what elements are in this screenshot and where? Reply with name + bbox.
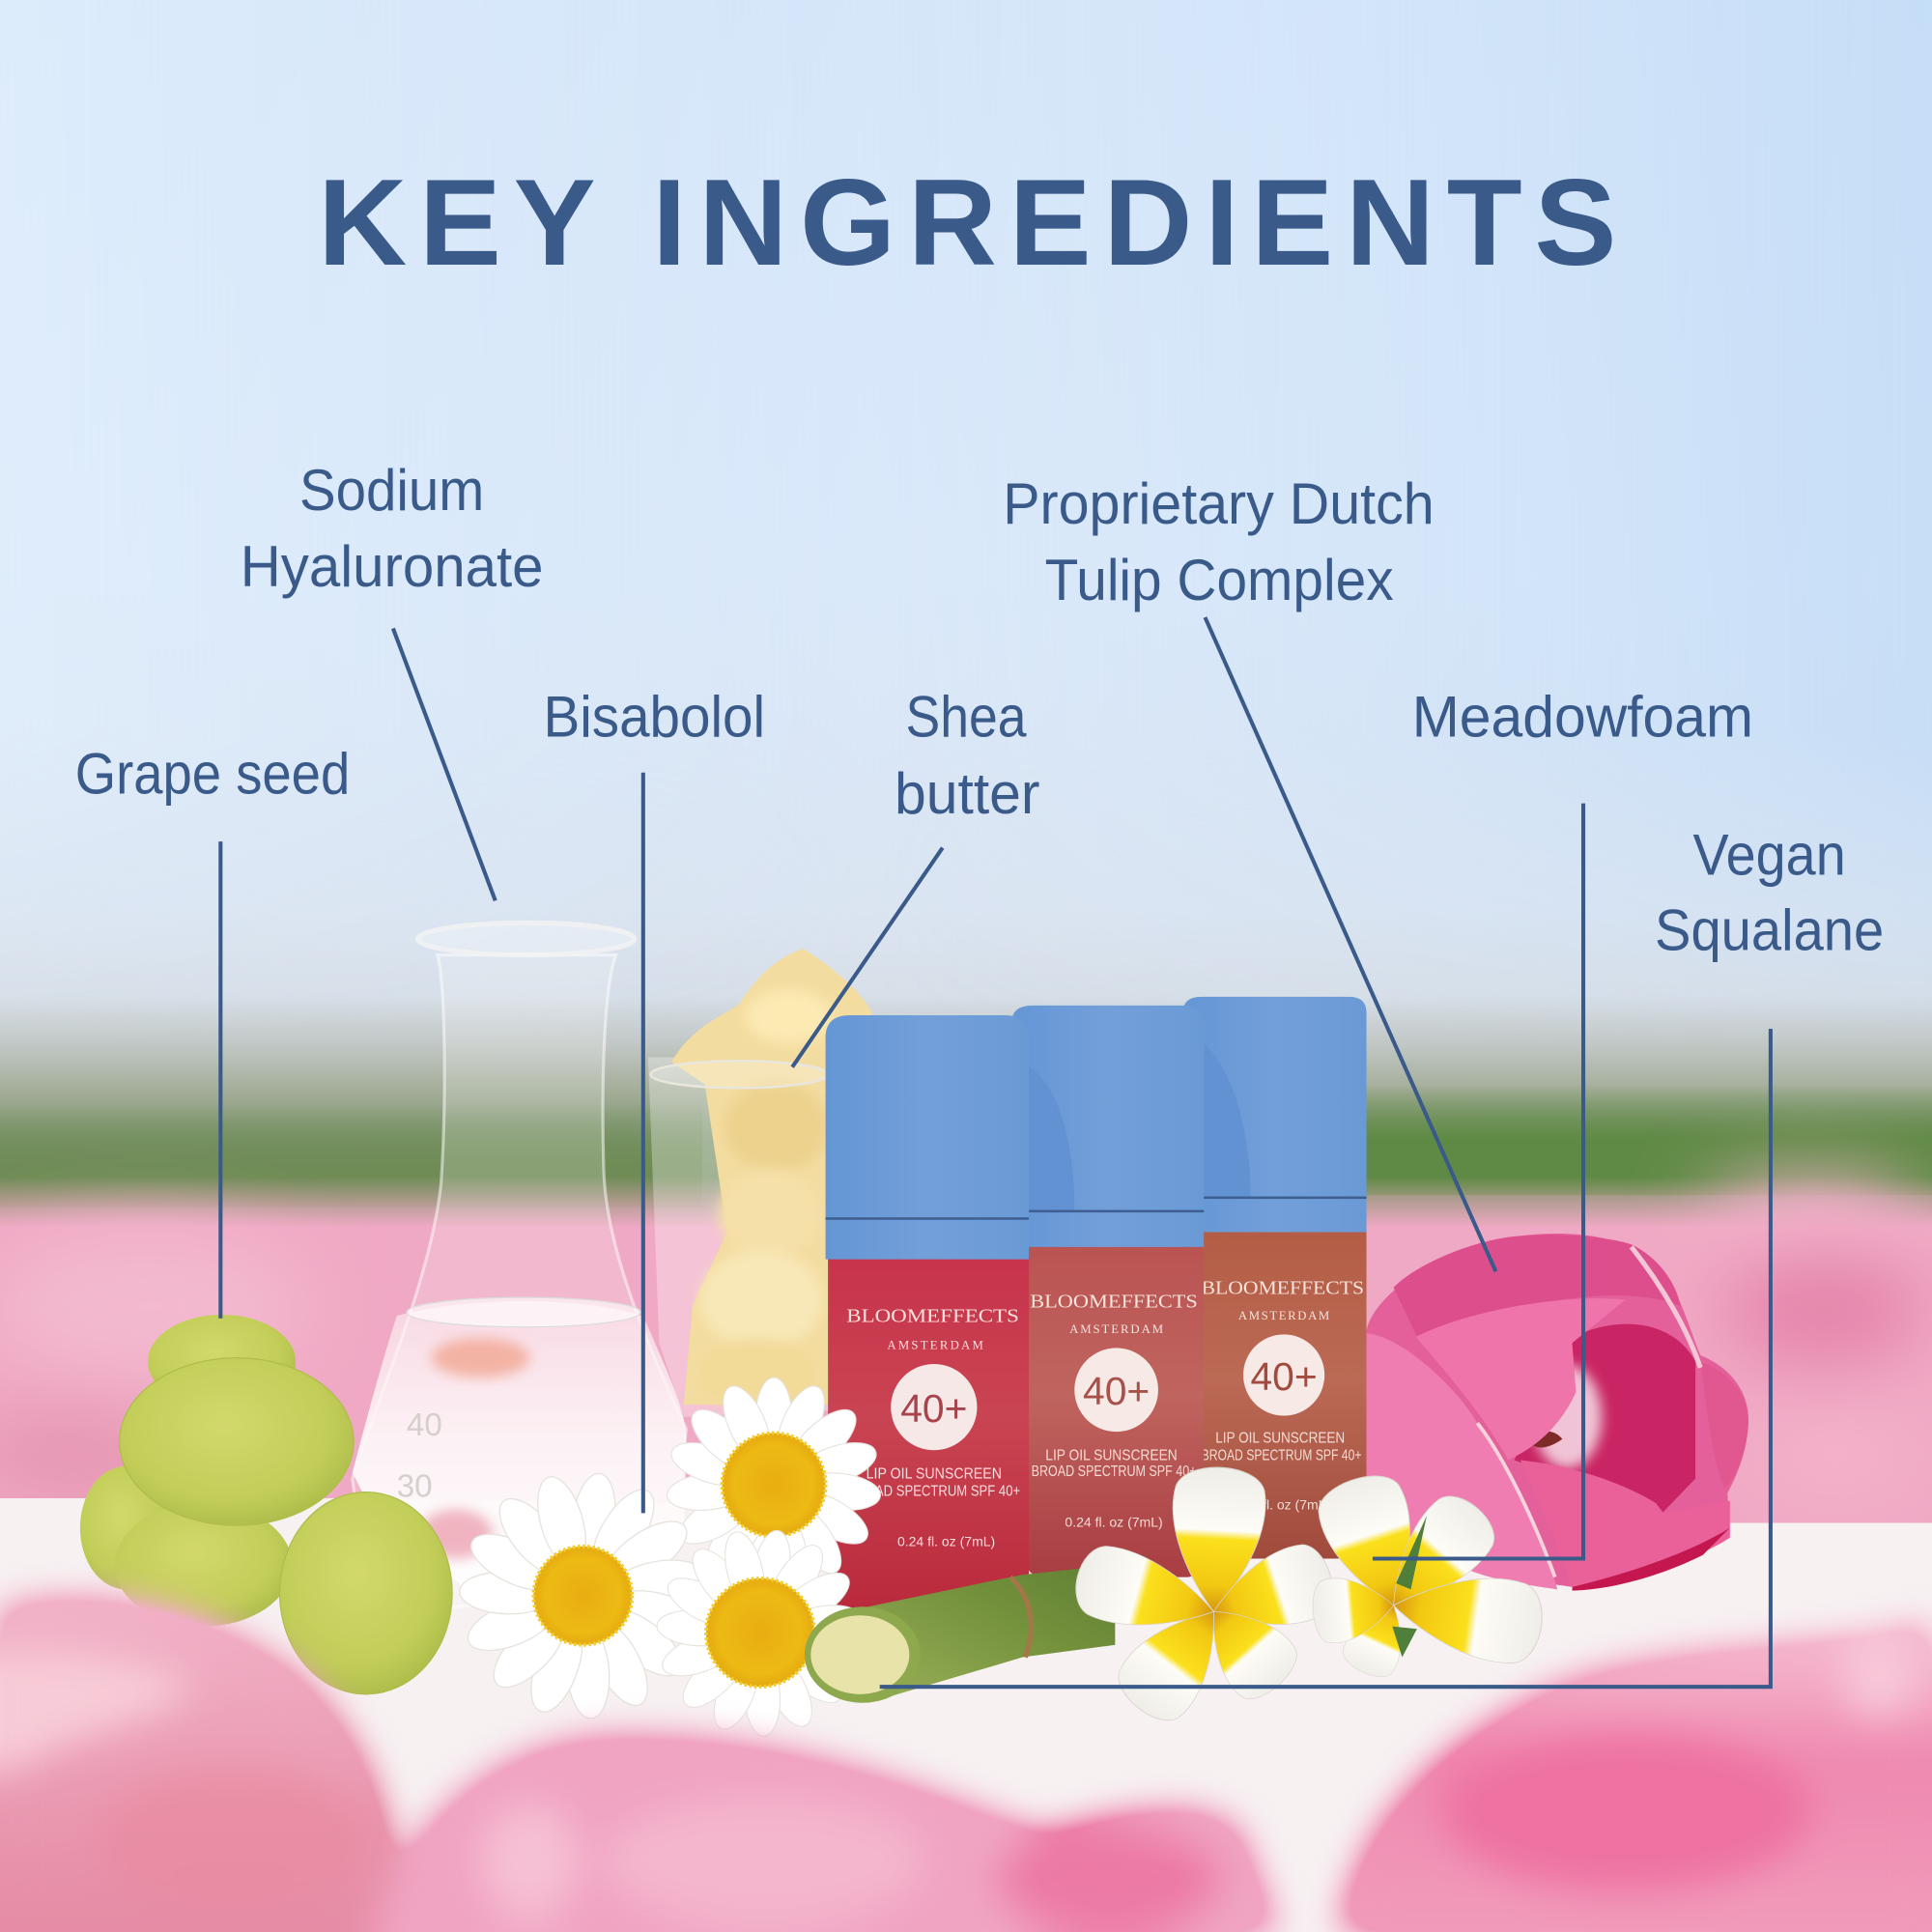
label: Vegan Squalane: Vegan xyxy=(1693,823,1846,888)
tulip: proprietary Dutch tulip complex xyxy=(1367,1234,1748,1591)
product: bottle 1: 0.24 fl. oz (7mL) xyxy=(897,1534,995,1549)
label: Shea butter xyxy=(895,685,1040,826)
leader line: vegan squalane xyxy=(880,1029,1771,1687)
label: Vegan Squalane xyxy=(1655,823,1884,962)
label: Proprietary Dutch Tulip Complex: Proprietary Dutch xyxy=(1003,471,1435,536)
product: bottle 1 xyxy=(826,1015,1029,1608)
product: bottle 2: 0.24 fl. oz (7mL) xyxy=(1065,1514,1163,1529)
bisabolol: daisies xyxy=(441,1378,882,1754)
vegan squalane: sugarcane stalk xyxy=(805,1565,1115,1703)
background: sky and horizon xyxy=(0,0,1932,1225)
flask: sodium hyaluronate xyxy=(353,923,686,1614)
label: Grape seed: Grape seed xyxy=(75,741,350,806)
label: Bisabolol: Bisabolol xyxy=(543,685,765,750)
label: Proprietary Dutch Tulip Complex: Tulip Complex xyxy=(1045,548,1394,612)
leader line: meadowfoam xyxy=(1373,804,1583,1559)
product: bottle 3 xyxy=(1182,997,1367,1559)
background: blurred pink flower field xyxy=(0,1177,1932,1540)
product: bottle 1: LIP OIL SUNSCREEN xyxy=(867,1466,1002,1483)
product: bottle 2: AMSTERDAM xyxy=(1069,1322,1163,1336)
label: Sodium Hyaluronate: Hyaluronate xyxy=(241,534,543,599)
leader line: tulip complex xyxy=(1205,617,1495,1271)
product: bottle 2: BROAD SPECTRUM SPF 40+ xyxy=(1032,1463,1197,1480)
foreground: blurred pink peonies xyxy=(0,1602,1932,1932)
product: bottle 1: 40+ xyxy=(900,1386,967,1431)
leader line: sodium hyaluronate xyxy=(393,629,496,900)
flask: sodium hyaluronate: 40 xyxy=(407,1407,442,1443)
label: Sodium Hyaluronate: Sodium xyxy=(299,458,484,523)
label: Shea butter: Shea xyxy=(906,685,1027,750)
product: bottle 3: AMSTERDAM xyxy=(1238,1309,1329,1322)
leader line: bisabolol xyxy=(641,773,644,1513)
label: Sodium Hyaluronate xyxy=(241,458,543,599)
product: bottle 3: 0.24 fl. oz (7mL) xyxy=(1233,1496,1330,1512)
jar: shea butter xyxy=(648,949,872,1417)
product: bottle 3: LIP OIL SUNSCREEN xyxy=(1215,1431,1345,1447)
label: Shea butter: butter xyxy=(895,761,1040,826)
label: Vegan Squalane: Squalane xyxy=(1655,897,1884,962)
label: Meadowfoam: Meadowfoam xyxy=(1412,685,1753,750)
title: KEY INGREDIENTS xyxy=(318,155,1616,292)
white table surface xyxy=(0,1498,1932,1932)
product: bottle 1: BLOOMEFFECTS xyxy=(846,1306,1019,1327)
product: bottle 1: BROAD SPECTRUM SPF 40+ xyxy=(848,1483,1020,1499)
leader line: shea butter xyxy=(792,848,943,1067)
product: bottle 1: AMSTERDAM xyxy=(887,1339,983,1352)
product: bottle 3: 40+ xyxy=(1250,1354,1318,1399)
label: Proprietary Dutch Tulip Complex xyxy=(1003,471,1435,612)
product: bottle 2: BLOOMEFFECTS xyxy=(1030,1291,1198,1312)
product: bottle 2: LIP OIL SUNSCREEN xyxy=(1045,1447,1178,1463)
grape seed: grapes xyxy=(80,1315,452,1694)
product: bottle 2: 40+ xyxy=(1083,1369,1150,1413)
product: bottle 3: BLOOMEFFECTS xyxy=(1202,1277,1364,1298)
flask: sodium hyaluronate: 30 xyxy=(397,1469,433,1505)
leader line: grape seed xyxy=(219,841,222,1319)
product: bottle 2 xyxy=(1011,1006,1204,1577)
product: bottle 3: BROAD SPECTRUM SPF 40+ xyxy=(1202,1447,1361,1463)
meadowfoam: flowers xyxy=(1068,1465,1548,1732)
